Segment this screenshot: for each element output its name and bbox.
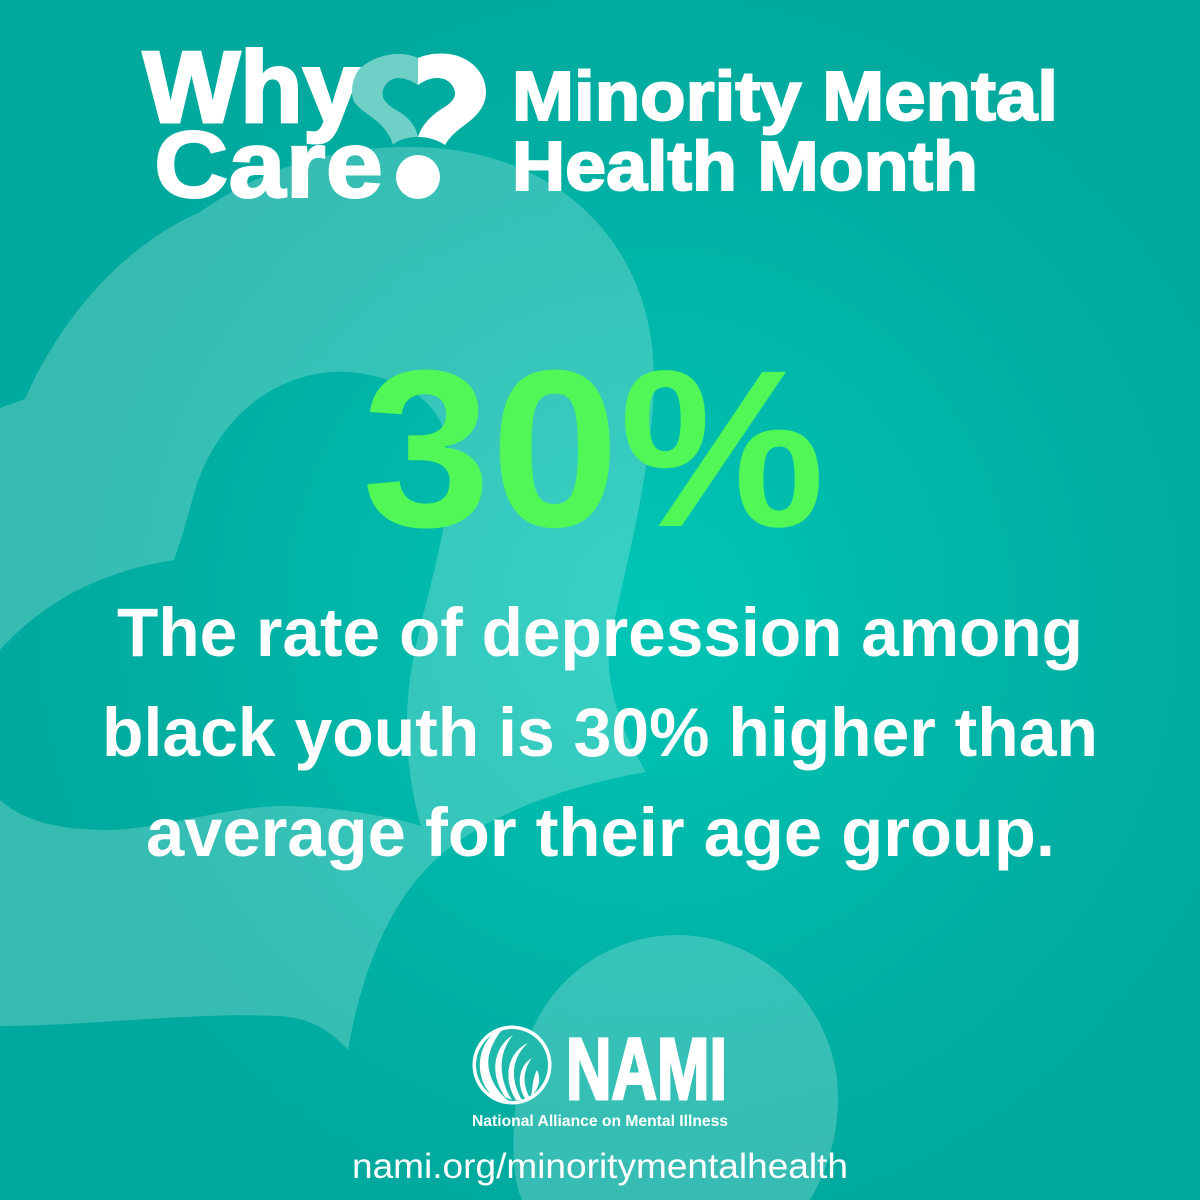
background watermark: question mark dot xyxy=(513,935,838,1200)
logo word: Why: Why xyxy=(143,32,360,144)
heading line 2: Health Month xyxy=(512,127,978,205)
big statistic: 30%: 30% xyxy=(362,324,825,574)
description line 3: average for their age group. xyxy=(146,794,1055,871)
logo word: Care: Care xyxy=(154,112,383,218)
logo word: NAMI: NAMI xyxy=(566,1021,727,1118)
icon: NAMI circular emblem xyxy=(472,1026,552,1104)
heading: Minority Mental Health Month xyxy=(512,57,1058,205)
description line 2: black youth is 30% higher than xyxy=(102,694,1098,771)
logo: question mark heart left half xyxy=(352,54,418,145)
logo tagline: National Alliance on Mental Illness xyxy=(472,1113,728,1130)
heading line 1: Minority Mental xyxy=(512,57,1058,135)
logo: question mark dot xyxy=(396,155,440,199)
logo: Why Care question heart xyxy=(143,32,486,218)
NAMI logo xyxy=(472,1021,728,1130)
statistic description xyxy=(102,594,1098,871)
website URL: nami.org/minoritymentalhealth xyxy=(352,1147,848,1186)
logo: question mark heart right half xyxy=(418,54,486,145)
description line 1: The rate of depression among xyxy=(117,594,1083,671)
background watermark: large heart question mark xyxy=(0,147,654,1050)
